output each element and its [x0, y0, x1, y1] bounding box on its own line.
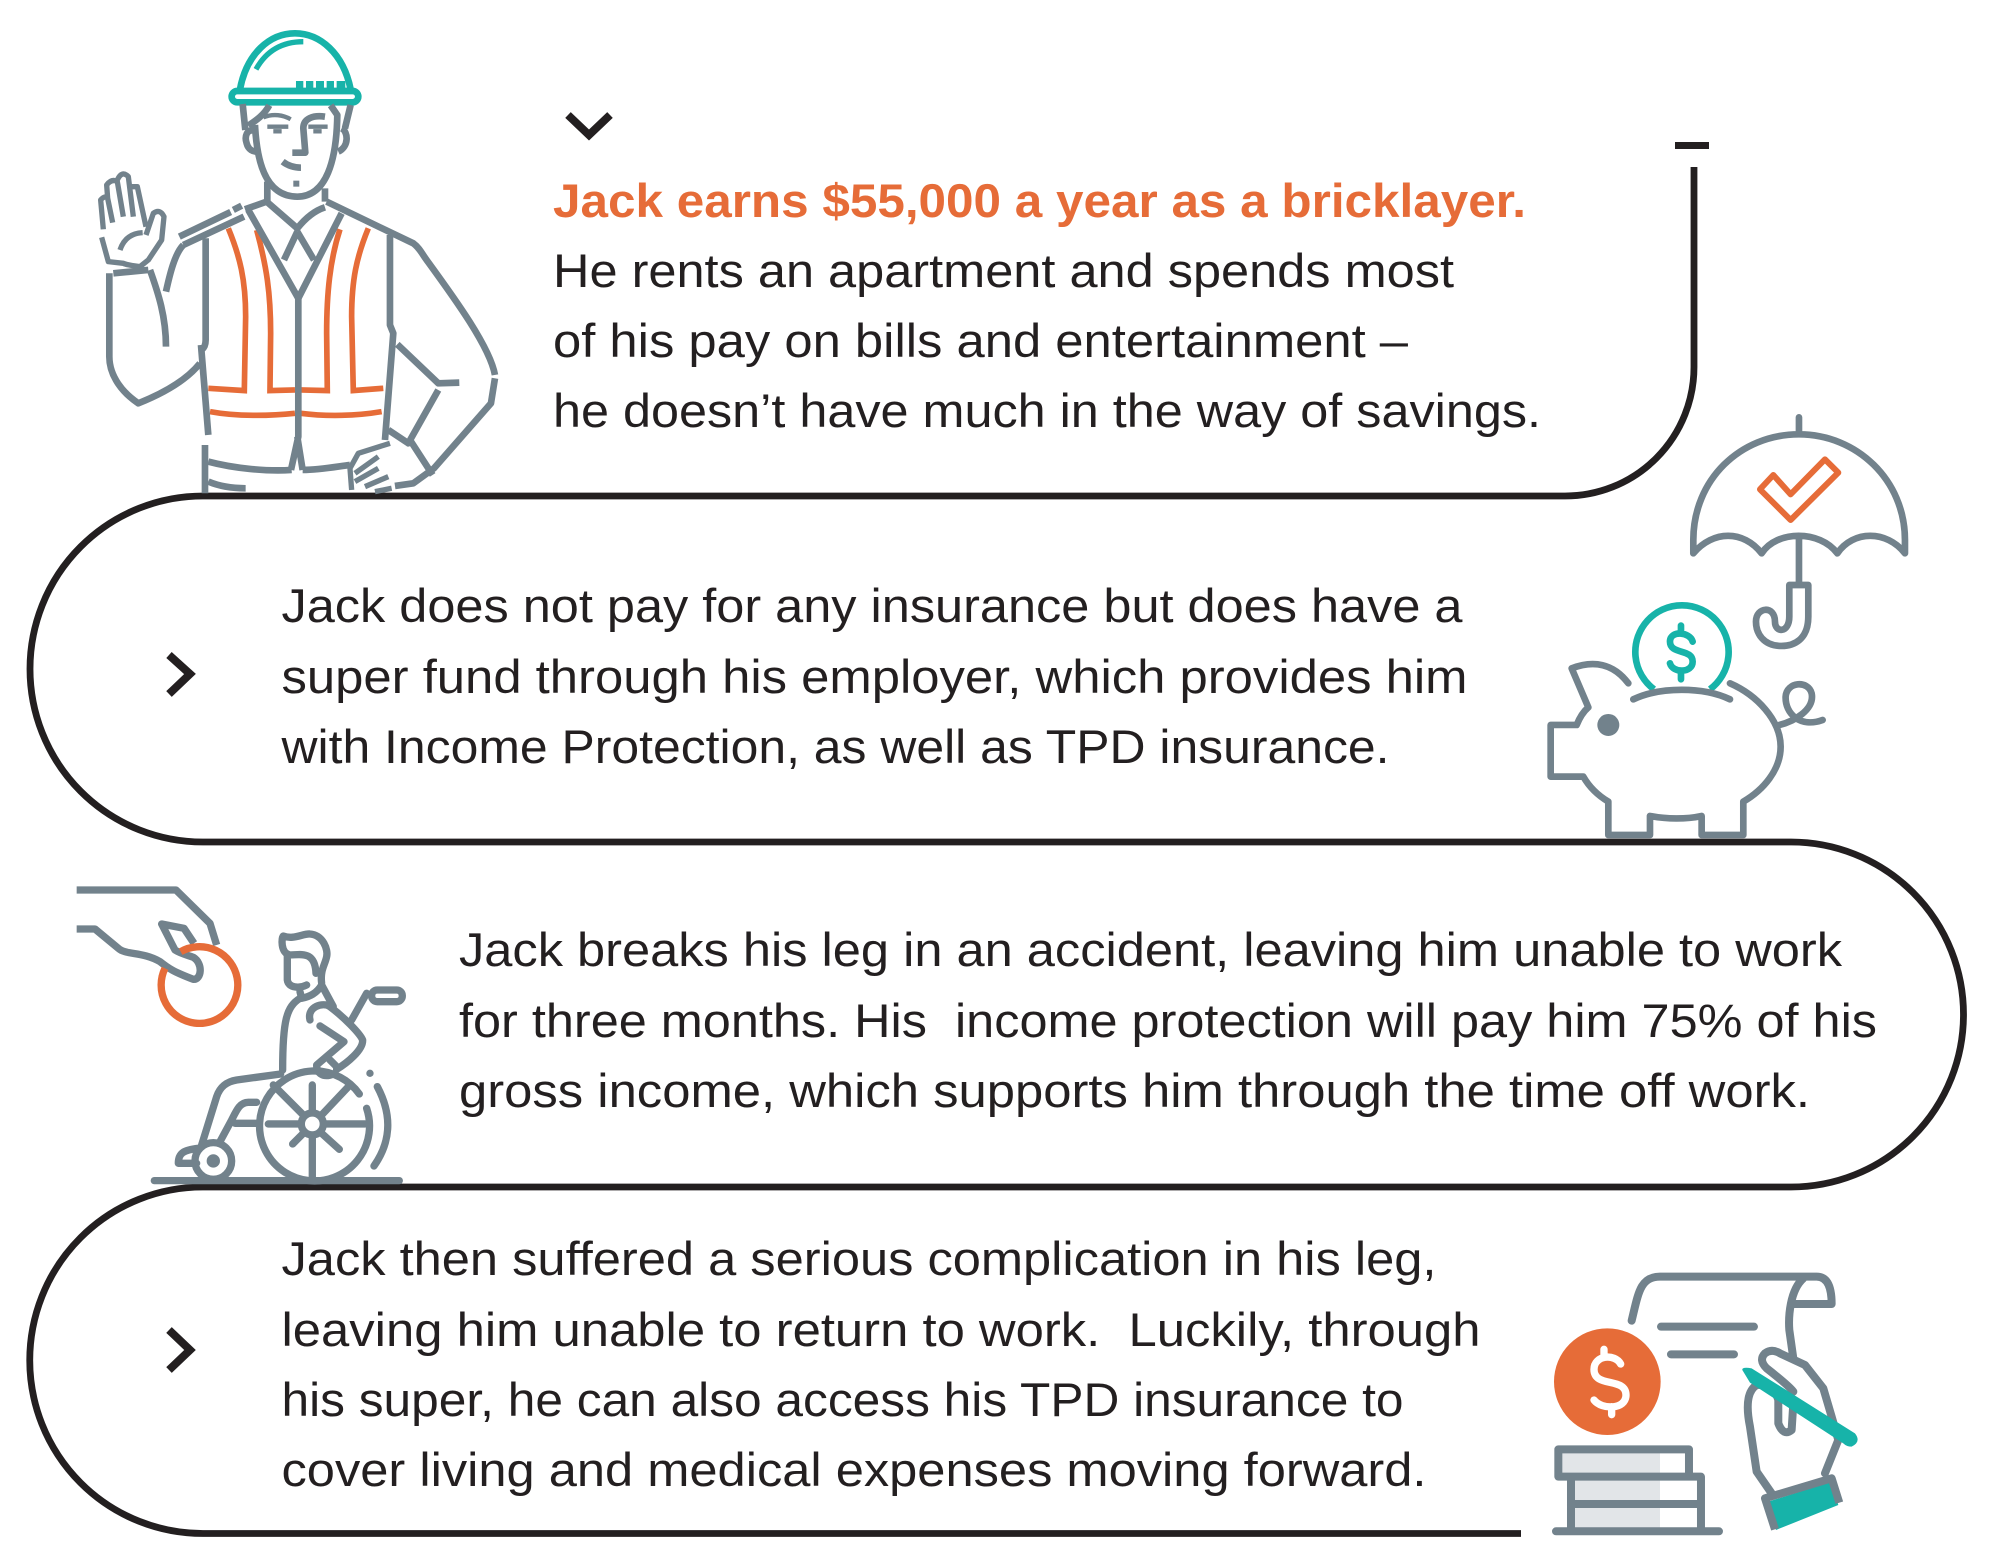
worker raised arm and hand [101, 174, 200, 403]
text block: TPD insurance: cover living and medical expenses moving forward. [282, 1443, 1426, 1496]
worker head [243, 104, 351, 202]
dollar coin [1554, 1328, 1661, 1435]
text block: Jack's job: He rents an apartment and spends most [553, 244, 1454, 297]
icon: construction worker [101, 33, 495, 493]
icon: piggy bank with coin [1551, 605, 1823, 835]
worker vest stripes [208, 228, 383, 415]
arrow: second chevron right [169, 655, 190, 694]
text block: Jack's job: he doesn’t have much in the way of savings. [553, 384, 1541, 437]
text block: TPD insurance: leaving him unable to return to work. Luckily, through [282, 1303, 1480, 1356]
coin [1635, 605, 1729, 689]
stack of books [1556, 1449, 1719, 1531]
text block: insurance through super: Jack does not pay for any insurance but does have a [282, 579, 1463, 632]
text block: TPD insurance: Jack then suffered a serious complication in his leg, [282, 1232, 1436, 1285]
text block: accident and income protection [459, 923, 1877, 1117]
worker body and vest [166, 202, 495, 493]
icon: signing document with coin and books [1554, 1277, 1858, 1531]
text block: insurance through super: super fund through his employer, which provides him [282, 650, 1468, 703]
text block: Jack's job: of his pay on bills and entertainment – [553, 314, 1409, 367]
text block: accident and income protection: for three months. His income protection will pay him 75% of his [459, 994, 1877, 1047]
path start dash [1675, 142, 1709, 149]
text block: insurance through super [280, 579, 1468, 773]
teal pen [1742, 1368, 1858, 1447]
document scroll [1632, 1277, 1832, 1358]
text block: accident and income protection: gross income, which supports him through the time off work. [459, 1064, 1810, 1117]
worker hand on hip [350, 344, 495, 492]
icon: man in wheelchair [154, 934, 402, 1181]
text block: Jack's job [553, 174, 1541, 437]
icon: hand giving coin [77, 890, 238, 1023]
highlighted headline: Jack earns $55,000 a year as a bricklayer. [553, 174, 1526, 227]
text block: TPD insurance: his super, he can also access his TPD insurance to [282, 1373, 1404, 1426]
pig body [1551, 664, 1823, 835]
icon: umbrella with check [1693, 417, 1905, 646]
text block: accident and income protection: Jack breaks his leg in an accident, leaving him unable to work [459, 923, 1843, 976]
worker hard hat [232, 33, 358, 102]
writing hand [1748, 1351, 1839, 1530]
text block: TPD insurance [282, 1232, 1480, 1496]
arrow: first chevron down [568, 115, 610, 135]
text block: insurance through super: with Income Protection, as well as TPD insurance. [280, 720, 1390, 773]
arrow: fourth chevron right [169, 1330, 190, 1370]
